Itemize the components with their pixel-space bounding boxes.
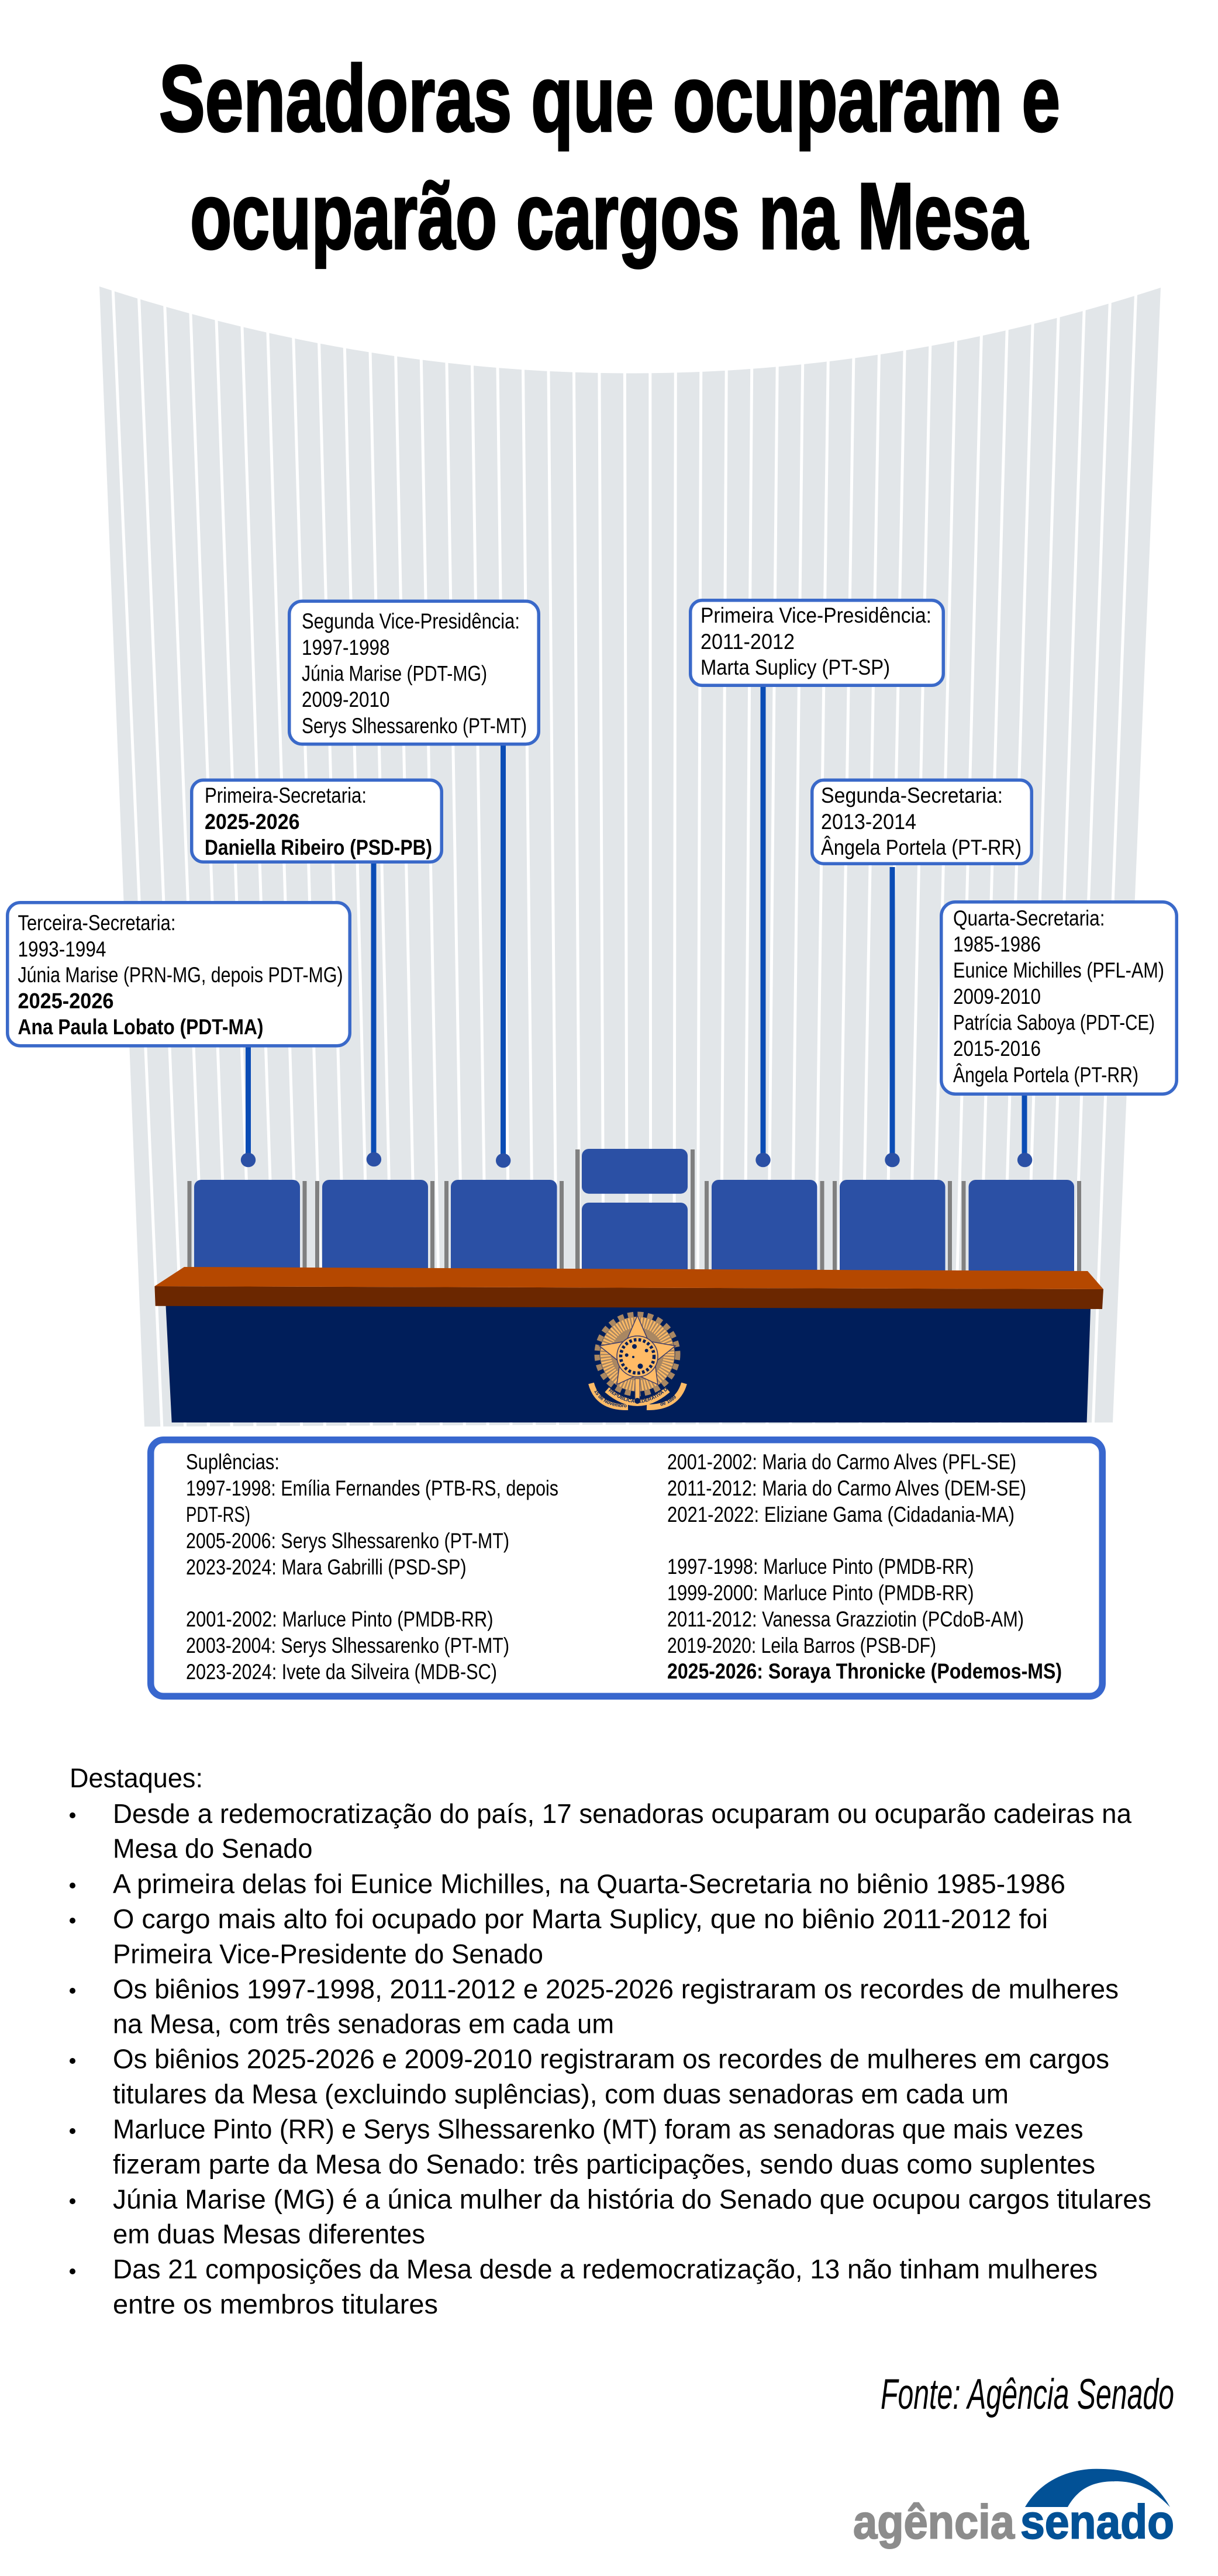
right column of substitutes: 2001-2002: Maria do Carmo Alves (PFL-SE) bbox=[667, 1450, 1016, 1474]
card: Terceira-Secretaria: Júnia Marise (PRN-MG, depois PDT-MG) bbox=[18, 963, 343, 987]
card: Segunda Vice-Presidência: 2009-2010 bbox=[302, 688, 389, 712]
card: Quarta-Secretaria: Ângela Portela (PT-RR) bbox=[953, 1063, 1138, 1087]
left column of substitutes: 2001-2002: Marluce Pinto (PMDB-RR) bbox=[186, 1607, 494, 1631]
card: Terceira-Secretaria: 1993-1994 bbox=[18, 937, 106, 961]
connector: Segunda-Secretaria bbox=[885, 867, 900, 1167]
card: Quarta-Secretaria: 2009-2010 bbox=[953, 985, 1041, 1009]
card: Primeira-Secretaria bbox=[192, 780, 441, 862]
right column of substitutes: 2011-2012: Maria do Carmo Alves (DEM-SE) bbox=[667, 1476, 1026, 1500]
left column of substitutes: PDT-RS) bbox=[186, 1503, 250, 1527]
card: Quarta-Secretaria: 1985-1986 bbox=[953, 932, 1041, 956]
text block: Destaques: Primeira Vice-Presidente do Senado bbox=[113, 1939, 543, 1969]
icon: Brazilian coat of arms: REPÚBLICA FEDERATIVA DO BRASIL bbox=[608, 1388, 667, 1403]
card: Segunda-Secretaria: Ângela Portela (PT-RR) bbox=[821, 835, 1022, 859]
text block: Destaques: titulares da Mesa (excluindo suplências), com duas senadoras em cada um bbox=[113, 2079, 1009, 2109]
left column of substitutes: 2023-2024: Mara Gabrilli (PSD-SP) bbox=[186, 1555, 467, 1579]
text block: Destaques bbox=[70, 1763, 1151, 2319]
left column of substitutes: 2005-2006: Serys Slhessarenko (PT-MT) bbox=[186, 1529, 509, 1553]
connector: Terceira-Secretaria bbox=[241, 1045, 256, 1167]
logo: Agência Senado: senado bbox=[1020, 2496, 1174, 2549]
text block: Destaques: em duas Mesas diferentes bbox=[113, 2219, 425, 2249]
right column of substitutes bbox=[667, 1450, 1062, 1683]
connector: Quarta-Secretaria bbox=[1017, 1094, 1032, 1167]
icon: Brazilian coat of arms bbox=[588, 1312, 687, 1410]
text block: Destaques: Júnia Marise (MG) é a única mulher da história do Senado que ocupou cargos titulares bbox=[113, 2184, 1151, 2215]
card: Primeira Vice-Presidência bbox=[691, 600, 943, 685]
card: Segunda-Secretaria: 2013-2014 bbox=[821, 810, 916, 834]
card: Segunda Vice-Presidência: Júnia Marise (PDT-MG) bbox=[302, 662, 487, 685]
right column of substitutes: 1999-2000: Marluce Pinto (PMDB-RR) bbox=[667, 1581, 974, 1605]
connector: Segunda Vice-Presidência bbox=[496, 744, 510, 1168]
left column of substitutes bbox=[186, 1450, 558, 1684]
text block: Destaques: na Mesa, com três senadoras em cada um bbox=[113, 2009, 614, 2039]
card: Primeira-Secretaria: 2025-2026 bbox=[205, 810, 299, 834]
card: Terceira-Secretaria: 2025-2026 bbox=[18, 989, 113, 1013]
text block: Destaques: Desde a redemocratização do país, 17 senadoras ocuparam ou ocuparão cadeiras na bbox=[113, 1798, 1131, 1829]
left column of substitutes: 1997-1998: Emília Fernandes (PTB-RS, depois bbox=[186, 1476, 558, 1500]
left column of substitutes: 2023-2024: Ivete da Silveira (MDB-SC) bbox=[186, 1660, 497, 1684]
left column of substitutes: Suplências: bbox=[186, 1450, 280, 1474]
panel: Suplências bbox=[151, 1440, 1102, 1696]
card: Primeira Vice-Presidência: Marta Suplicy (PT-SP) bbox=[701, 655, 890, 679]
right column of substitutes: 2011-2012: Vanessa Grazziotin (PCdoB-AM) bbox=[667, 1607, 1024, 1631]
logo: Agência Senado bbox=[853, 2469, 1174, 2549]
desk bbox=[154, 1267, 1103, 1422]
logo: Agência Senado: agência bbox=[853, 2496, 1015, 2549]
right column of substitutes: 2019-2020: Leila Barros (PSB-DF) bbox=[667, 1634, 936, 1658]
background: curved striped wall bbox=[99, 286, 1161, 1429]
card: Terceira-Secretaria: Terceira-Secretaria: bbox=[18, 911, 175, 935]
right column of substitutes: 2025-2026: Soraya Thronicke (Podemos-MS) bbox=[667, 1659, 1062, 1683]
text block: Destaques: O cargo mais alto foi ocupado por Marta Suplicy, que no biênio 2011-2012 foi bbox=[113, 1904, 1048, 1934]
card: Segunda-Secretaria bbox=[812, 780, 1031, 864]
card: Quarta-Secretaria: Eunice Michilles (PFL-AM) bbox=[953, 958, 1164, 982]
card: Primeira Vice-Presidência: 2011-2012 bbox=[701, 630, 795, 654]
left column of substitutes: 2003-2004: Serys Slhessarenko (PT-MT) bbox=[186, 1634, 509, 1658]
right column of substitutes: 1997-1998: Marluce Pinto (PMDB-RR) bbox=[667, 1555, 974, 1579]
icon: Brazilian coat of arms: 15 de Novembro bbox=[594, 1390, 627, 1408]
text block: Destaques: A primeira delas foi Eunice Michilles, na Quarta-Secretaria no biênio 1985-1986 bbox=[113, 1869, 1065, 1899]
card: Primeira-Secretaria: Daniella Ribeiro (PSD-PB) bbox=[205, 835, 432, 859]
chairs bbox=[187, 1149, 1081, 1279]
card: Quarta-Secretaria: Patrícia Saboya (PDT-CE) bbox=[953, 1010, 1155, 1035]
connector: Primeira Vice-Presidência bbox=[755, 686, 771, 1167]
card: Primeira-Secretaria: Primeira-Secretaria: bbox=[205, 783, 367, 807]
card: Segunda Vice-Presidência: Segunda Vice-Presidência: bbox=[302, 609, 520, 633]
text block: Destaques: Mesa do Senado bbox=[113, 1833, 312, 1864]
icon: Brazilian coat of arms: de 1889 bbox=[661, 1395, 676, 1406]
card: Quarta-Secretaria: 2015-2016 bbox=[953, 1037, 1041, 1061]
card: Segunda Vice-Presidência: Serys Slhessarenko (PT-MT) bbox=[302, 714, 527, 738]
card: Primeira Vice-Presidência: Primeira Vice-Presidência: bbox=[701, 603, 931, 627]
card: Segunda Vice-Presidência: 1997-1998 bbox=[302, 636, 389, 659]
card: Segunda Vice-Presidência bbox=[289, 601, 539, 744]
card: Terceira-Secretaria bbox=[8, 903, 350, 1046]
text block: Destaques: Marluce Pinto (RR) e Serys Slhessarenko (MT) foram as senadoras que mais vezes bbox=[113, 2114, 1083, 2145]
right column of substitutes: 2021-2022: Eliziane Gama (Cidadania-MA) bbox=[667, 1503, 1015, 1527]
card: Quarta-Secretaria bbox=[941, 902, 1176, 1094]
card: Segunda-Secretaria: Segunda-Secretaria: bbox=[821, 783, 1003, 807]
title bbox=[159, 46, 1060, 269]
text block: Destaques: Destaques: bbox=[70, 1763, 203, 1793]
card: Terceira-Secretaria: Ana Paula Lobato (PDT-MA) bbox=[18, 1015, 263, 1039]
text block: Destaques: fizeram parte da Mesa do Senado: três participações, sendo duas como suplentes bbox=[113, 2149, 1095, 2180]
text block: Destaques: entre os membros titulares bbox=[113, 2289, 438, 2319]
card: Quarta-Secretaria: Quarta-Secretaria: bbox=[953, 906, 1105, 930]
text block: Destaques: Os biênios 2025-2026 e 2009-2010 registraram os recordes de mulheres em cargos bbox=[113, 2044, 1109, 2074]
text block: Destaques: Das 21 composições da Mesa desde a redemocratização, 13 não tinham mulheres bbox=[113, 2254, 1098, 2284]
text block: Destaques: Os biênios 1997-1998, 2011-2012 e 2025-2026 registraram os recordes de mulheres bbox=[113, 1974, 1119, 2004]
connector: Primeira-Secretaria bbox=[367, 862, 381, 1166]
